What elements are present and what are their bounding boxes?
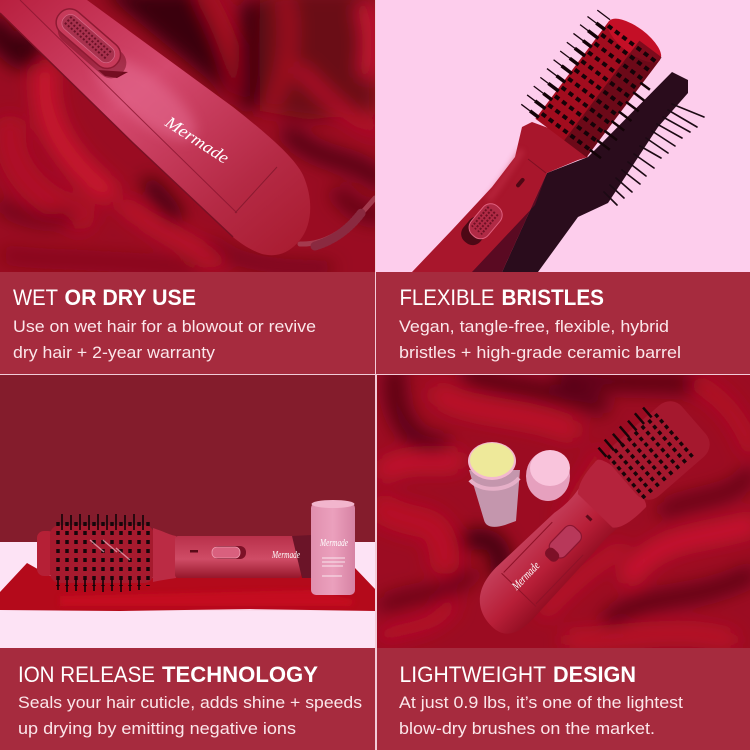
photo: brush and stick on red cloth bbox=[0, 375, 375, 648]
body text: bristles + high-grade ceramic barrel bbox=[399, 343, 681, 362]
slider switch bbox=[55, 8, 126, 78]
body text: blow-dry brushes on the market. bbox=[399, 719, 655, 738]
caption panel bbox=[376, 272, 750, 374]
caption panel bbox=[377, 648, 750, 750]
panel: flexible bristles bbox=[376, 0, 750, 374]
body text bbox=[18, 693, 362, 738]
body text: Vegan, tangle-free, flexible, hybrid bbox=[399, 317, 669, 336]
brush handle bbox=[412, 122, 588, 272]
slider bbox=[212, 546, 246, 559]
body text: dry hair + 2-year warranty bbox=[13, 343, 216, 362]
body text bbox=[399, 693, 683, 738]
heading: ION RELEASE bbox=[18, 662, 155, 687]
brand script logo: Mermade bbox=[161, 112, 233, 168]
heading: DESIGN bbox=[553, 662, 636, 687]
body text: up drying by emitting negative ions bbox=[18, 719, 296, 738]
panel: ion release technology bbox=[0, 375, 375, 750]
stick product with open cap bbox=[468, 442, 570, 527]
heading: TECHNOLOGY bbox=[162, 662, 318, 687]
caption panel bbox=[0, 272, 375, 374]
body text: Use on wet hair for a blowout or revive bbox=[13, 317, 316, 336]
body text bbox=[13, 317, 316, 362]
cast shadow bbox=[502, 72, 704, 272]
brush handle bbox=[0, 0, 310, 255]
heading: WET bbox=[13, 285, 58, 310]
photo: satin fabric with brush handle bbox=[0, 0, 380, 272]
body text: At just 0.9 lbs, it’s one of the lightest bbox=[399, 693, 683, 712]
body text: Seals your hair cuticle, adds shine + speeds bbox=[18, 693, 362, 712]
red cloth bbox=[0, 563, 375, 611]
caption panel bbox=[0, 648, 375, 750]
panel: wet or dry use bbox=[0, 0, 380, 374]
barrel with bristles bbox=[520, 10, 662, 159]
brush bbox=[480, 401, 710, 634]
power cord bbox=[300, 198, 375, 246]
heading bbox=[18, 662, 318, 687]
heading: FLEXIBLE bbox=[400, 285, 494, 310]
heading: LIGHTWEIGHT bbox=[400, 662, 546, 687]
brand script logo: Mermade bbox=[271, 550, 300, 561]
photo: brush on pink background bbox=[376, 0, 750, 272]
photo: satin fabric with brush and stick bbox=[377, 375, 750, 651]
heading bbox=[400, 662, 636, 687]
body text bbox=[399, 317, 681, 362]
pink stick product: Mermade bbox=[319, 538, 348, 549]
slider bbox=[461, 203, 503, 246]
heading: BRISTLES bbox=[502, 285, 604, 310]
brush bbox=[37, 514, 312, 592]
heading: OR DRY USE bbox=[64, 285, 196, 310]
heading bbox=[400, 285, 604, 310]
brush: Mermade bbox=[508, 558, 543, 593]
pink stick product bbox=[311, 500, 355, 595]
panel: lightweight design bbox=[377, 375, 750, 750]
